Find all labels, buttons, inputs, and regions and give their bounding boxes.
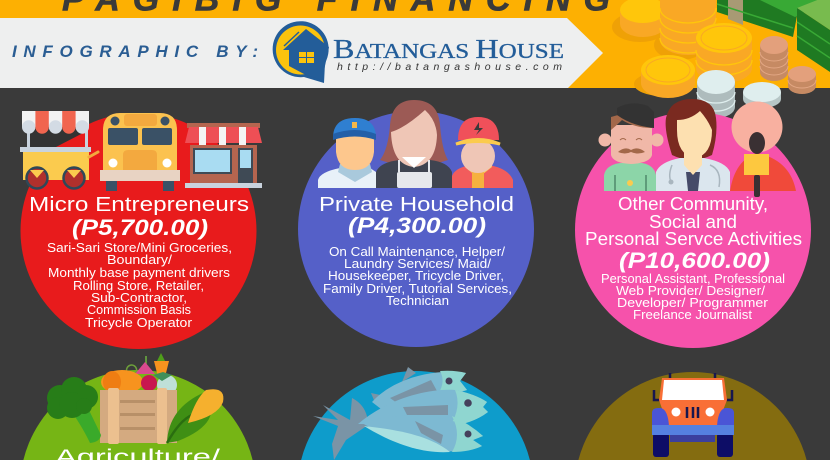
description: micro entrepreneurs: Sub-Contractor,	[91, 290, 187, 305]
tail fins	[313, 398, 368, 460]
panel: transport	[574, 372, 810, 460]
icon: technician	[452, 117, 513, 188]
amount: P10,600.00: (P10,600.00)	[619, 248, 770, 273]
description: other community: Freelance Journalist	[633, 307, 752, 322]
panel: fisheries	[298, 367, 534, 460]
heading: other community	[585, 194, 802, 249]
icon: tuna fish	[313, 367, 488, 460]
panel: agriculture	[20, 353, 256, 460]
amount: P5,700.00: (P5,700.00)	[72, 215, 208, 240]
icon: reporter with microphone	[730, 102, 796, 197]
copper coin stacks	[760, 36, 816, 94]
logo url: http://batangashouse.com	[337, 61, 562, 73]
bottom fish	[362, 416, 483, 451]
description: micro entrepreneurs: Boundary/	[107, 252, 172, 267]
icon: man with moustache	[598, 103, 664, 191]
icon: broccoli	[47, 377, 101, 443]
icon: corn	[167, 389, 223, 443]
white ribbon	[0, 18, 603, 88]
icon: school bus	[100, 113, 180, 191]
icon: Batangas House logo	[273, 21, 329, 83]
gold coin stacks	[620, 0, 752, 98]
description: other community: Web Provider/ Designer/	[616, 283, 765, 298]
description: other community	[601, 271, 785, 322]
middle fish	[358, 390, 488, 426]
description: micro entrepreneurs: Monthly base payment drivers	[48, 265, 231, 280]
description: micro entrepreneurs: Commission Basis	[87, 302, 191, 317]
icon: doctor	[656, 99, 730, 191]
description: private household: Family Driver, Tutorial Services,	[323, 281, 512, 296]
coin shadows	[612, 12, 706, 96]
description: other community: Developer/ Programmer	[617, 295, 769, 310]
panel: private household	[298, 100, 534, 347]
heading: other community: Social and	[649, 212, 737, 232]
heading: micro entrepreneurs: Micro Entrepreneurs	[29, 194, 249, 216]
icon: storefront	[185, 123, 262, 188]
description: micro entrepreneurs: Sari-Sari Store/Mini Groceries,	[47, 240, 232, 255]
amount: P4,300.00: (P4,300.00)	[348, 213, 486, 238]
icon: jeepney	[652, 373, 734, 457]
description: micro entrepreneurs: Rolling Store, Retailer,	[73, 278, 204, 293]
banknote stacks	[717, 0, 830, 72]
icon: food cart	[20, 111, 98, 188]
icon: money and coins	[612, 0, 830, 118]
heading: other community: Other Community,	[618, 194, 768, 214]
panel: micro entrepreneurs	[20, 111, 262, 349]
description: private household: Housekeeper, Tricycle Driver,	[328, 268, 504, 283]
heading: other community: Personal Servce Activities	[585, 229, 802, 249]
description: micro entrepreneurs: Tricycle Operator	[85, 315, 193, 330]
silver coin stacks	[697, 70, 781, 118]
icon: housemaid	[376, 100, 452, 188]
header banner	[0, 0, 830, 88]
infographic by label: INFOGRAPHIC BY:	[12, 42, 258, 61]
heading: private household: Private Household	[319, 194, 514, 216]
description: private household: Laundry Services/ Maid/	[344, 256, 491, 271]
logo wordmark: BATANGAS HOUSE	[333, 34, 564, 64]
icon: vegetable crate	[100, 353, 177, 444]
description: private household	[323, 244, 512, 308]
top fish	[372, 372, 467, 412]
description: other community: Personal Assistant, Professional	[601, 271, 785, 286]
panel: other community, social and personal service activities	[575, 99, 811, 348]
description: private household: Technician	[386, 293, 449, 308]
description: private household: On Call Maintenance, Helper/	[329, 244, 505, 259]
icon: security guard	[318, 118, 376, 188]
description: micro entrepreneurs	[47, 240, 232, 330]
